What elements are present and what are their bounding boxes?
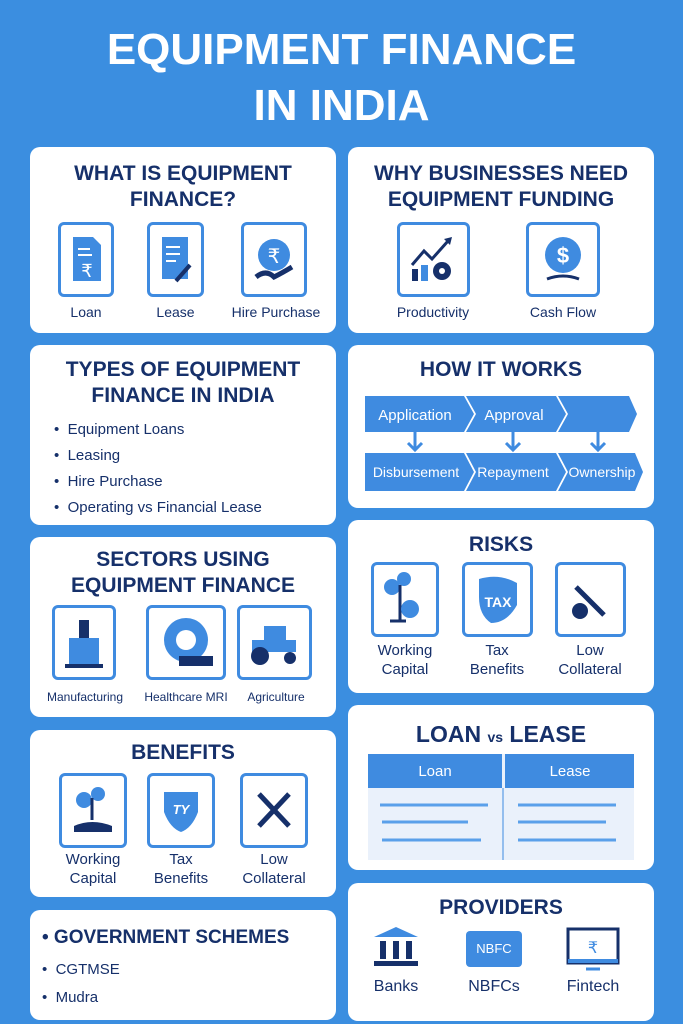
- list: • Operating vs Financial Lease: [54, 499, 262, 516]
- panel: types: [30, 345, 336, 525]
- list: • Equipment Loans: [54, 421, 184, 438]
- panel: benefits: Benefits: [154, 870, 208, 887]
- heading: SECTORS USING: [96, 548, 270, 571]
- title: IN INDIA: [254, 81, 430, 130]
- icon: cash flow: [526, 222, 600, 297]
- icon: hire purchase: [241, 222, 307, 297]
- heading: WHAT IS EQUIPMENT: [74, 162, 292, 185]
- list: • Leasing: [54, 447, 120, 464]
- flow diagram: Repayment: [477, 464, 549, 480]
- icon: loan: [58, 222, 114, 297]
- text: • GOVERNMENT SCHEMES: [42, 927, 289, 948]
- heading: PROVIDERS: [439, 896, 563, 919]
- panel: risks: Tax: [485, 642, 509, 659]
- panel: what is equipment finance: [30, 147, 336, 333]
- panel: government schemes: [30, 910, 336, 1020]
- comparison table: Lease: [550, 763, 590, 780]
- flow diagram: Application: [378, 407, 452, 424]
- flow diagram: Ownership: [569, 464, 636, 480]
- labels: [66, 851, 120, 887]
- panel: providers: [348, 883, 654, 1021]
- icon: nbfc: NBFC: [476, 941, 512, 956]
- heading: HOW IT WORKS: [420, 358, 582, 381]
- panel: how it works: [348, 345, 654, 508]
- panel: providers: NBFCs: [468, 978, 520, 995]
- panel: sectors: [30, 537, 336, 717]
- heading: [66, 358, 300, 407]
- labels: Capital: [70, 870, 116, 887]
- panel: what is equipment finance: Hire Purchase: [232, 304, 320, 320]
- comparison table: [368, 754, 634, 860]
- heading: [374, 162, 628, 211]
- comparison table: Loan: [418, 763, 452, 780]
- panel: sectors: Agriculture: [247, 690, 305, 704]
- labels: Loan: [70, 304, 102, 320]
- icon: tax: [462, 562, 533, 637]
- labels: Productivity: [397, 304, 469, 320]
- icon: productivity: [397, 222, 470, 297]
- panel: government schemes: • Mudra: [42, 989, 98, 1006]
- panel: benefits: Collateral: [242, 870, 306, 887]
- panel: risks: Benefits: [470, 661, 524, 678]
- labels: Capital: [382, 661, 428, 678]
- heading: TYPES OF EQUIPMENT: [66, 358, 300, 381]
- icon: lease: [147, 222, 204, 297]
- title: EQUIPMENT FINANCE: [107, 25, 576, 74]
- list: [54, 421, 262, 516]
- icon: manufacturing: [52, 605, 116, 680]
- icon: agriculture: [237, 605, 312, 680]
- panel: risks: [348, 520, 654, 693]
- panel: risks: Low: [576, 642, 604, 659]
- list: • Hire Purchase: [54, 473, 163, 490]
- icon: tax: TY: [173, 802, 191, 817]
- title: [107, 25, 576, 130]
- icon: collateral: [555, 562, 626, 637]
- icon: tools: [240, 773, 308, 848]
- flow diagram: Approval: [484, 407, 544, 424]
- heading: FINANCE?: [130, 188, 236, 211]
- labels: Banks: [374, 978, 418, 995]
- panel: providers: Fintech: [567, 978, 619, 995]
- flow diagram: Disbursement: [373, 464, 459, 480]
- icon: hire purchase: ₹: [268, 244, 280, 268]
- heading: [71, 548, 295, 597]
- panel: why businesses need funding: Cash Flow: [530, 304, 596, 320]
- icon: tax: [147, 773, 215, 848]
- icon: working capital: [371, 562, 439, 637]
- panel: what is equipment finance: Lease: [156, 304, 195, 320]
- flow diagram: [365, 396, 643, 491]
- labels: Working: [66, 851, 120, 868]
- panel: benefits: Tax: [169, 851, 193, 868]
- heading: [74, 162, 292, 211]
- heading: EQUIPMENT FUNDING: [388, 188, 614, 211]
- icon: bank: [374, 927, 418, 966]
- heading: EQUIPMENT FINANCE: [71, 574, 295, 597]
- heading: WHY BUSINESSES NEED: [374, 162, 628, 185]
- panel: government schemes: • CGTMSE: [42, 961, 120, 978]
- panel: loan vs lease: [348, 705, 654, 870]
- icon: fintech: ₹: [588, 938, 598, 957]
- heading: BENEFITS: [131, 741, 235, 764]
- panel: sectors: Healthcare MRI: [144, 690, 228, 704]
- icon: cash flow: $: [557, 243, 569, 268]
- labels: [378, 642, 432, 678]
- labels: Working: [378, 642, 432, 659]
- heading: RISKS: [469, 533, 533, 556]
- icon: working capital: [59, 773, 127, 848]
- panel: benefits: [30, 730, 336, 897]
- icon: tax: TAX: [485, 594, 512, 610]
- heading: LOAN vs LEASE: [416, 721, 586, 747]
- icon: healthcare: [146, 605, 226, 680]
- panel: benefits: Low: [260, 851, 288, 868]
- panel: risks: Collateral: [558, 661, 622, 678]
- heading: FINANCE IN INDIA: [91, 384, 275, 407]
- labels: Manufacturing: [47, 690, 123, 704]
- icon: nbfc: [466, 931, 522, 967]
- icon: fintech: [566, 928, 620, 970]
- icon: loan: ₹: [81, 261, 93, 282]
- panel: why businesses need funding: [348, 147, 654, 333]
